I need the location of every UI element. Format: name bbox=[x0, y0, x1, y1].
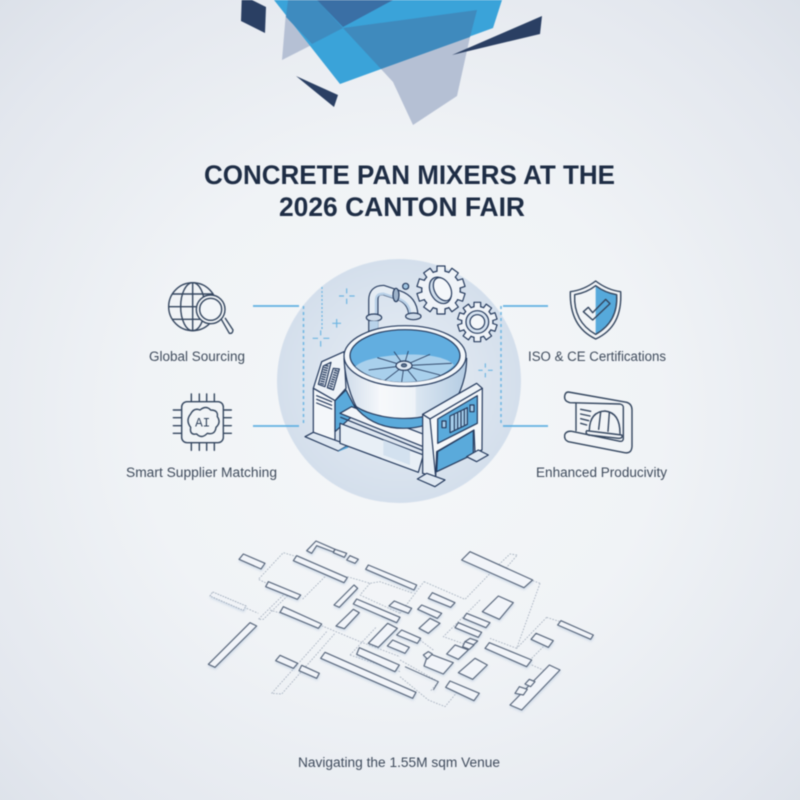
exhibition hall blocks bbox=[208, 541, 593, 710]
icon: AI chip bbox=[173, 394, 231, 450]
bowl bbox=[344, 326, 467, 428]
title: 2026 CANTON FAIR bbox=[279, 192, 525, 222]
label: Global Sourcing: Global Sourcing bbox=[149, 349, 245, 364]
left control cabinet bbox=[305, 352, 357, 452]
central circle backdrop bbox=[277, 259, 521, 503]
gear small bbox=[458, 302, 497, 342]
icon: certification shield bbox=[570, 281, 621, 339]
label: Smart Supplier Matching: Smart Supplier Matching bbox=[126, 465, 277, 480]
sparkles bbox=[313, 288, 493, 377]
dashed circulation paths bbox=[247, 553, 560, 707]
gear large bbox=[417, 266, 465, 314]
pipe bbox=[366, 283, 421, 335]
label: Enhanced Producivity: Enhanced Producivity bbox=[536, 465, 667, 480]
icon: blueprint with hard hat bbox=[565, 392, 632, 453]
venue floor plan map bbox=[208, 541, 593, 710]
icon: globe with magnifier bbox=[169, 283, 233, 333]
illustration: concrete pan mixer bbox=[305, 266, 497, 487]
title bbox=[204, 160, 615, 222]
mixing blades bbox=[369, 351, 452, 382]
label: ISO & CE Certifications: ISO & CE Certifications bbox=[528, 349, 666, 364]
connector lines bbox=[253, 287, 548, 426]
decorative geometric header shapes bbox=[241, 0, 542, 125]
icon: AI chip: AI bbox=[195, 415, 210, 430]
title: CONCRETE PAN MIXERS AT THE bbox=[204, 160, 615, 190]
machine bed bbox=[340, 407, 430, 472]
right gear housing bbox=[417, 383, 488, 487]
caption: Navigating the 1.55M sqm Venue bbox=[298, 755, 500, 770]
